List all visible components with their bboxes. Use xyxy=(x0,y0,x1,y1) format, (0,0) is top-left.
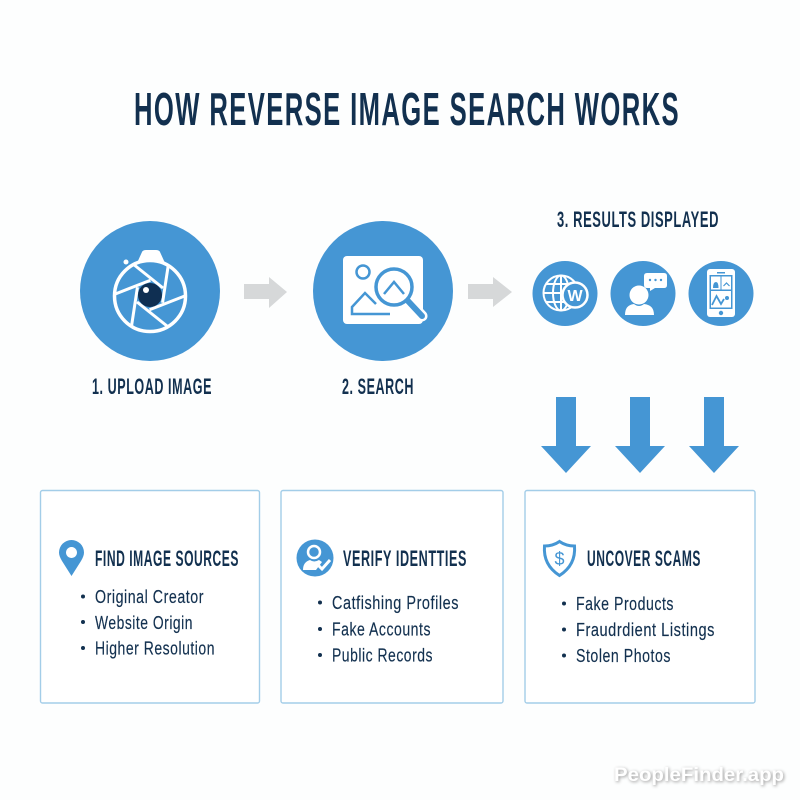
list: identity results: Fake Accounts xyxy=(332,618,431,640)
watermark: PeopleFinder.app xyxy=(614,765,784,786)
icon: phone with image results xyxy=(688,261,754,326)
heading: verify identities: VERIFY IDENTTIES xyxy=(343,546,467,571)
arrows: results down to cards xyxy=(541,397,739,473)
heading: find image sources: FIND IMAGE SOURCES xyxy=(95,546,239,571)
icon: dollar shield: $ xyxy=(554,549,565,569)
icon: dollar shield xyxy=(544,542,575,576)
icon: globe website xyxy=(532,261,598,326)
list: identity results: Catfishing Profiles xyxy=(332,592,459,613)
list: image source results xyxy=(81,586,215,658)
step 3: results displayed xyxy=(532,207,754,326)
list: scam results: Fraudrdient Listings xyxy=(576,619,715,640)
icon: person with speech bubble xyxy=(610,261,676,326)
icon: verified person xyxy=(296,540,334,576)
step 1: upload image xyxy=(80,221,220,399)
icon: globe website: W xyxy=(567,288,583,305)
list: image source results: Original Creator xyxy=(95,586,204,607)
list: scam results xyxy=(562,593,715,666)
icon: camera aperture xyxy=(80,221,220,361)
panel: find image sources xyxy=(40,490,260,703)
icon: image magnifier xyxy=(313,221,453,361)
heading: uncover scams: UNCOVER SCAMS xyxy=(587,546,701,571)
panel: verify identities xyxy=(281,490,503,703)
list: identity results xyxy=(318,592,459,666)
panel: uncover scams xyxy=(525,490,755,703)
icon: location pin xyxy=(59,540,84,576)
step 2: search xyxy=(313,221,453,399)
list: identity results: Public Records xyxy=(332,644,433,666)
list: image source results: Website Origin xyxy=(95,612,193,633)
arrow: step 1 to step 2 xyxy=(244,277,287,308)
list: scam results: Fake Products xyxy=(576,593,674,614)
list: scam results: Stolen Photos xyxy=(576,645,671,666)
step 1 label: 1. UPLOAD IMAGE xyxy=(92,374,212,399)
list: image source results: Higher Resolution xyxy=(95,638,215,658)
step 2 label: 2. SEARCH xyxy=(342,374,414,399)
arrow: step 2 to step 3 xyxy=(468,277,512,307)
